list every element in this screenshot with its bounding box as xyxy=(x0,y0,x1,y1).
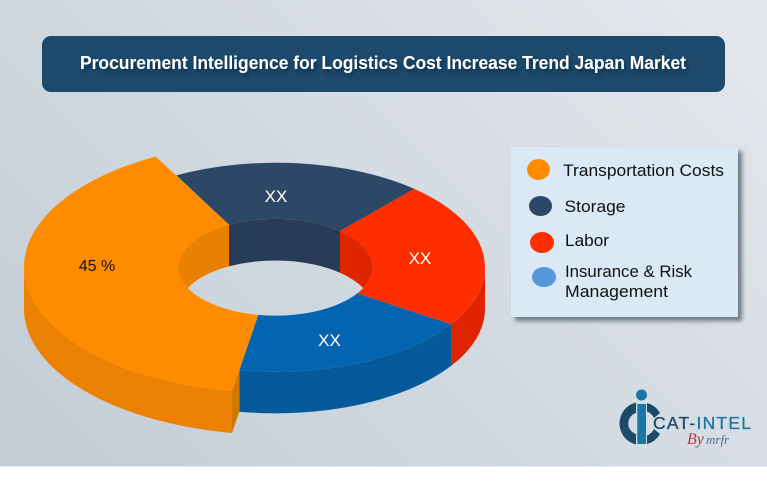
side wall: insurance xyxy=(239,324,451,413)
inner wall: labor xyxy=(340,231,373,288)
label: storage XX: XX xyxy=(265,187,287,206)
logo tagline: mrfr xyxy=(706,432,730,447)
label: insurance XX: XX xyxy=(318,331,341,350)
label: labor XX: XX xyxy=(409,249,431,268)
title banner xyxy=(42,36,725,92)
end wall: transportation xyxy=(232,370,239,433)
slice: insurance and risk xyxy=(239,293,451,372)
legend: storage xyxy=(529,196,626,216)
slice: transportation xyxy=(24,156,258,391)
legend: storage: Storage xyxy=(564,198,626,216)
icon: logo C mark xyxy=(620,390,660,444)
title: Procurement Intelligence for Logistics Cost Increase Trend Japan Market xyxy=(80,53,686,73)
legend: insurance and risk management: Management xyxy=(565,283,668,301)
legend: labor: Labor xyxy=(565,232,610,250)
slice: storage xyxy=(176,163,414,231)
logo tagline: By xyxy=(687,431,705,448)
donut chart xyxy=(24,156,485,433)
legend: insurance and risk management xyxy=(532,263,693,301)
legend: labor xyxy=(530,232,610,253)
side wall: labor xyxy=(451,267,485,366)
legend: transportation costs: Transportation Costs xyxy=(563,162,724,180)
legend: transportation costs xyxy=(527,159,724,180)
legend panel xyxy=(511,147,738,317)
label: 45 %: 45 % xyxy=(79,258,115,275)
logo: CAT-INTEL by mrfr xyxy=(620,390,751,448)
inner wall: storage xyxy=(229,219,340,273)
legend: insurance and risk management: Insurance & Risk xyxy=(565,263,693,281)
side wall: transportation xyxy=(24,267,232,433)
inner wall: transportation xyxy=(178,225,229,288)
slice: labor xyxy=(340,189,485,324)
logo wordmark: CAT-INTEL xyxy=(653,413,751,433)
